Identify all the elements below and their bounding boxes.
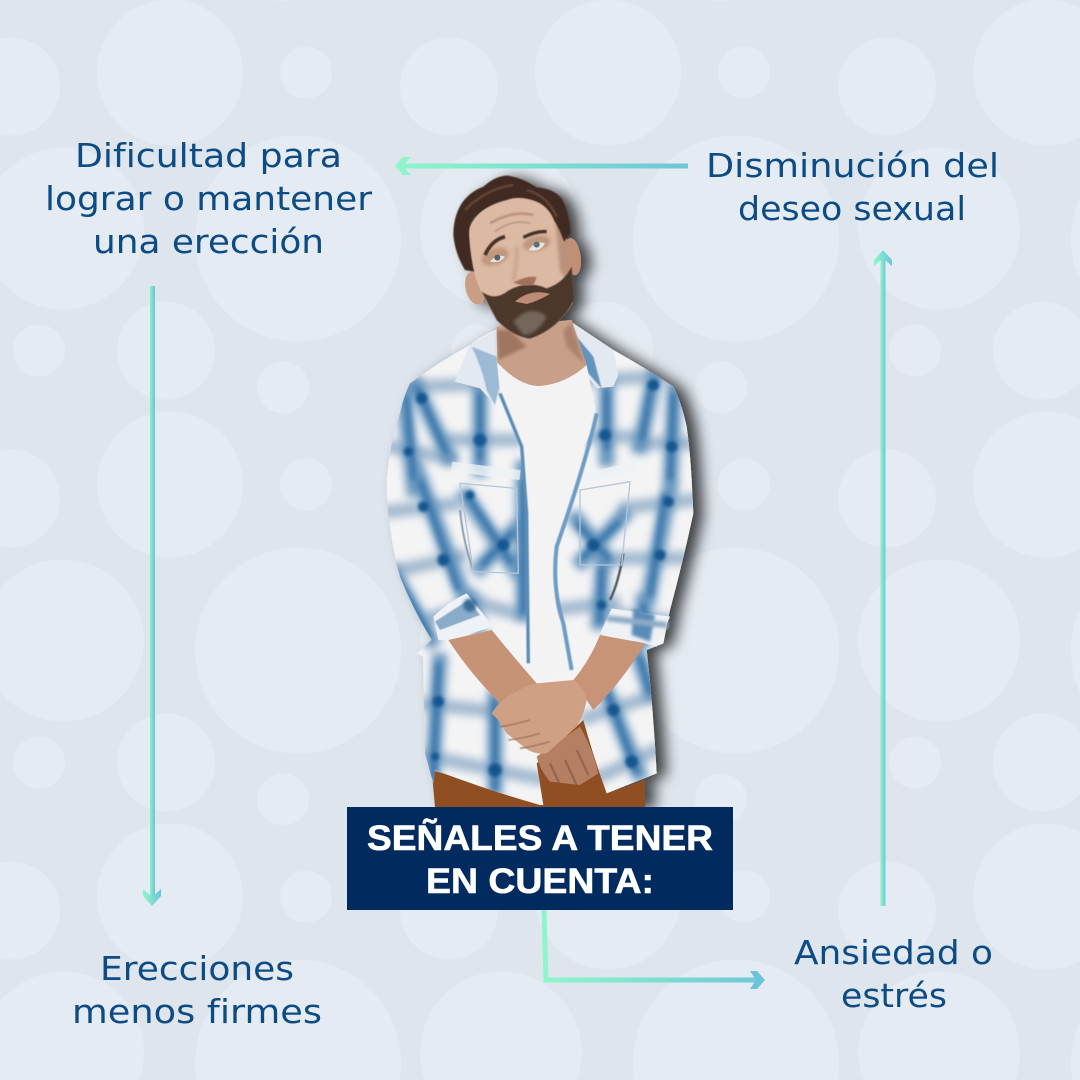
head — [453, 176, 583, 339]
front hand — [492, 680, 587, 754]
right collar — [573, 323, 618, 388]
pocket flaps and folds — [452, 465, 638, 480]
eyes — [490, 256, 505, 262]
title text: EN CUENTA: — [426, 862, 654, 901]
arrow: right, upwards — [874, 250, 892, 906]
eyebrows — [485, 237, 505, 255]
left collar — [455, 330, 499, 405]
label: Disminución del deseo sexual: Disminución del — [706, 146, 999, 185]
nose shadow — [513, 277, 537, 285]
label: Erecciones menos firmes: menos firmes — [72, 992, 322, 1031]
lower lip — [515, 292, 550, 304]
trousers — [432, 720, 645, 807]
forearms — [448, 630, 537, 703]
pocket edges — [460, 483, 518, 573]
back hand — [537, 727, 598, 785]
label: Ansiedad o estrés: estrés — [841, 976, 947, 1015]
arrow: top, towards Dificultad — [395, 157, 688, 175]
face — [469, 197, 573, 337]
left cuff — [433, 593, 493, 640]
label: Dificultad para lograr o mantener una erección: Dificultad para — [75, 136, 342, 175]
title text: SEÑALES A TENER — [367, 819, 713, 858]
label: Ansiedad o estrés: Ansiedad o — [794, 933, 993, 972]
label: Disminución del deseo sexual: deseo sexual — [738, 189, 966, 228]
label: Erecciones menos firmes: Erecciones — [100, 949, 294, 988]
photo: worried man looking up — [373, 176, 707, 807]
placket — [555, 413, 597, 670]
t-shirt — [497, 362, 597, 677]
neck — [497, 320, 587, 386]
arrow: elbow, towards Ansiedad — [544, 910, 765, 989]
label: Dificultad para lograr o mantener una erección: una erección — [93, 222, 324, 261]
label: Dificultad para lograr o mantener una erección: lograr o mantener — [45, 179, 372, 218]
right cuff — [600, 608, 670, 647]
arrow: left, downwards — [143, 286, 161, 906]
shirt — [373, 323, 707, 805]
ears — [462, 270, 488, 307]
title box — [347, 807, 733, 910]
beard — [482, 267, 574, 339]
hair — [453, 176, 571, 272]
facial shading — [479, 214, 573, 293]
